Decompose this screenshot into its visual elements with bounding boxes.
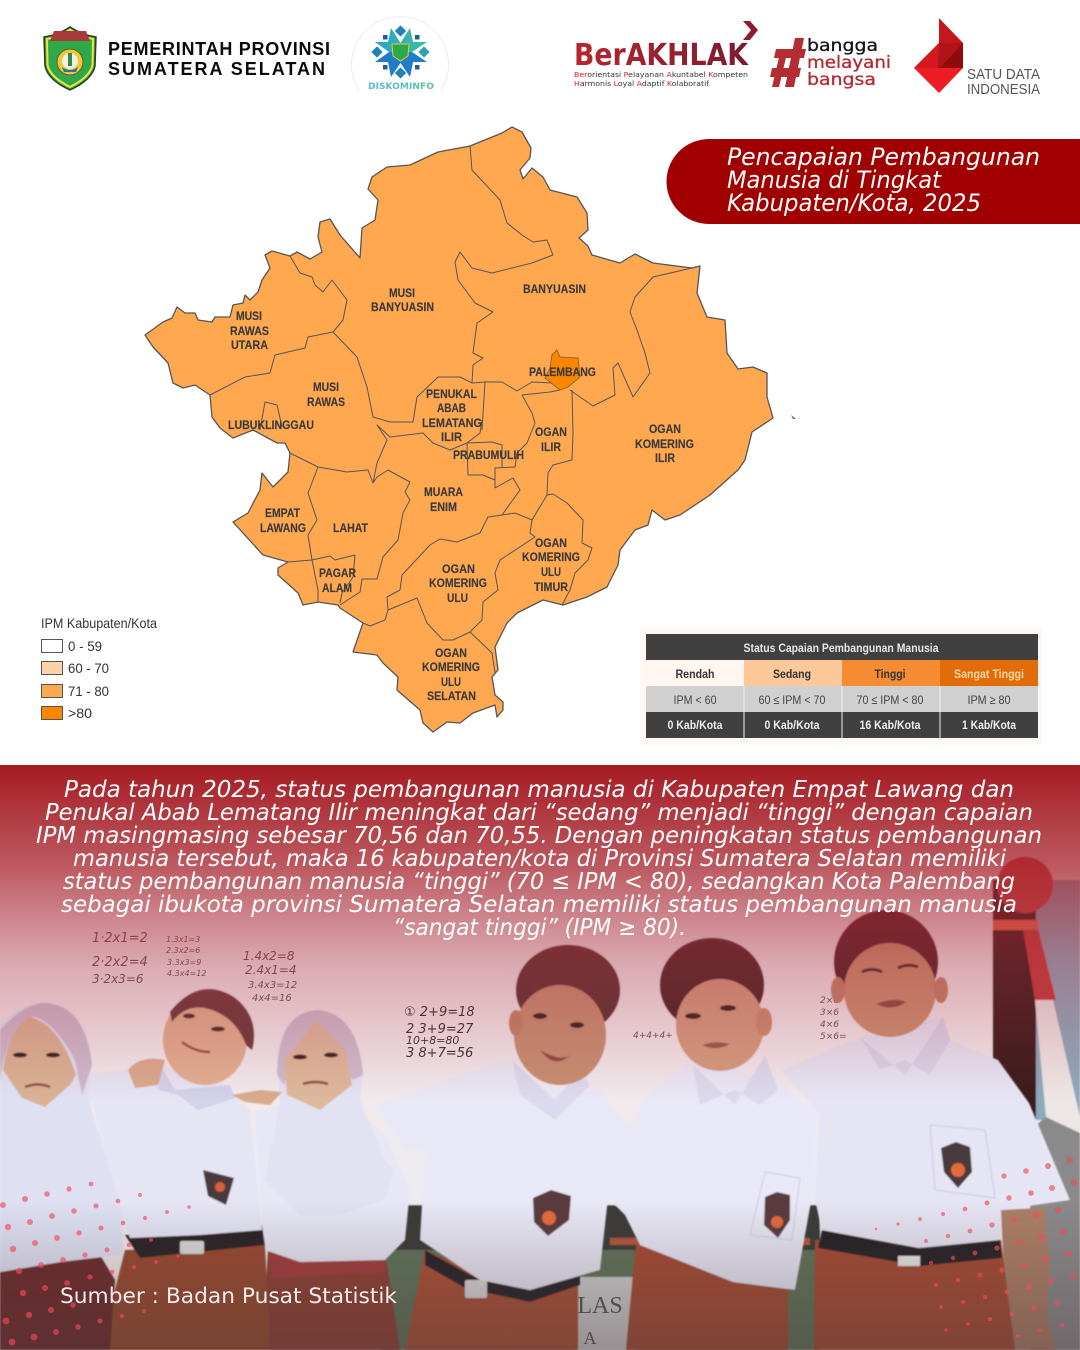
child 2 bbox=[85, 989, 282, 1350]
icon: provincial coat of arms bbox=[44, 27, 96, 90]
photo: background scene bbox=[380, 856, 1080, 1350]
photo: chalk arithmetic on board: 2×6 bbox=[820, 996, 839, 1006]
icon: hash bbox=[770, 38, 806, 87]
labels: district names: RAWAS bbox=[230, 324, 269, 338]
labels: district names: ILIR bbox=[541, 440, 561, 454]
labels: district names: SELATAN bbox=[427, 689, 476, 703]
panel: photo of schoolchildren with red overlay bbox=[0, 765, 1080, 1350]
labels: district names: OGAN bbox=[535, 425, 567, 439]
labels: district names: OGAN bbox=[649, 422, 681, 436]
child 6 bbox=[781, 910, 1070, 1350]
labels: district names: ULU bbox=[447, 591, 468, 605]
labels: district names: ILIR bbox=[655, 451, 675, 465]
labels: district names: ULU bbox=[541, 565, 561, 579]
logo: Satu Data Indonesia bbox=[914, 18, 1040, 98]
range row bbox=[646, 686, 1038, 712]
photo: chalk arithmetic on board: 4x4=16 bbox=[252, 993, 292, 1004]
labels: district names: EMPAT bbox=[265, 506, 301, 520]
logo: bangga melayani bangsa bbox=[770, 36, 891, 90]
labels: district names: ABAB bbox=[437, 401, 466, 415]
status row: Tinggi bbox=[874, 667, 906, 681]
child 4 bbox=[375, 945, 632, 1350]
text block: narrative paragraph: IPM masingmasing sebesar 70,56 dan 70,55. Dengan peningkatan status pembangunan bbox=[36, 823, 1042, 849]
count row: 16 Kab/Kota bbox=[860, 718, 921, 732]
text block: narrative paragraph: “sangat tinggi” (IPM ≥ 80). bbox=[393, 915, 686, 941]
count row bbox=[646, 712, 1038, 738]
tagline: BerAKHLAK line 2: Harmonis Loyal Adaptif Kolaboratif bbox=[574, 80, 710, 88]
photo: chalk arithmetic on board: 2.4x1=4 bbox=[245, 963, 297, 977]
banner shape bbox=[667, 139, 1080, 224]
legend item 0-59: 0 - 59 bbox=[68, 638, 102, 654]
labels: district names: RAWAS bbox=[307, 395, 345, 409]
photo: chalk arithmetic on board: 10+8=80 bbox=[406, 1034, 459, 1047]
range row: IPM < 60 bbox=[674, 693, 717, 707]
legend item 71-80: 71 - 80 bbox=[68, 683, 109, 699]
table: Status Capaian Pembangunan Manusia bbox=[640, 628, 1042, 745]
logo: BerAKHLAK bbox=[574, 21, 758, 88]
tagline: BerAKHLAK line 1: Berorientasi Pelayanan Akuntabel Kompeten bbox=[574, 71, 748, 79]
overlay: grey bottom gradient bbox=[0, 1216, 1080, 1350]
labels: district names bbox=[228, 282, 694, 703]
labels: district names: PENUKAL bbox=[426, 387, 477, 401]
labels: district names: MUSI bbox=[236, 309, 262, 323]
labels: district names: MUSI bbox=[313, 380, 339, 394]
decoration: red dot pattern bbox=[0, 1157, 1077, 1345]
text block: narrative paragraph: manusia tersebut, maka 16 kabupaten/kota di Provinsi Sumatera Selatan memiliki bbox=[73, 846, 1007, 872]
labels: district names: UTARA bbox=[231, 338, 268, 352]
photo: chalk arithmetic on board: LAS bbox=[577, 1293, 623, 1319]
labels: district names: BANYUASIN bbox=[523, 282, 586, 296]
labels: district names: ENIM bbox=[430, 500, 457, 514]
photo: chalk arithmetic on board: 3×6 bbox=[820, 1008, 839, 1018]
photo: chalk arithmetic on board: 5×6= bbox=[820, 1032, 847, 1042]
labels: district names: MUARA bbox=[424, 485, 463, 499]
logo: Pemerintah Provinsi Sumatera Selatan bbox=[44, 27, 330, 90]
labels: district names: TIMUR bbox=[534, 580, 568, 594]
range row: 70 ≤ IPM < 80 bbox=[856, 693, 924, 707]
labels: district names: LAHAT bbox=[333, 521, 369, 535]
logo: Diskominfo bbox=[351, 16, 449, 91]
photo: chalk arithmetic on board: A bbox=[584, 1328, 596, 1348]
map: South Sumatra IPM choropleth bbox=[145, 127, 796, 732]
count row: 0 Kab/Kota bbox=[764, 718, 820, 732]
source credit: Sumber : Badan Pusat Statistik bbox=[60, 1284, 398, 1308]
labels: district names: BANYUASIN bbox=[371, 300, 434, 314]
photo: chalk arithmetic on board: ① 2+9=18 bbox=[404, 1005, 475, 1020]
region: Palembang highlighted bbox=[545, 350, 580, 390]
status row: Sedang bbox=[773, 667, 811, 681]
labels: district names: ULU bbox=[441, 675, 461, 689]
photo: chalk arithmetic on board: 1.3x1=3 bbox=[166, 935, 200, 944]
labels: district names: MUSI bbox=[389, 286, 415, 300]
labels: district names: PAGAR bbox=[319, 566, 356, 580]
icon: small island bbox=[791, 415, 796, 419]
photo: chalk arithmetic on board: 4×6 bbox=[820, 1020, 839, 1030]
labels: district names: KOMERING bbox=[422, 660, 480, 674]
photo: chalk arithmetic on board: 1·2x1=2 bbox=[92, 931, 148, 946]
icon: red kite bbox=[914, 18, 963, 93]
title banner bbox=[667, 139, 1080, 224]
labels: district names: KOMERING bbox=[429, 576, 487, 590]
labels: district names: LEMATANG bbox=[422, 416, 482, 430]
legend item 60-70: 60 - 70 bbox=[68, 660, 109, 676]
labels: district names: PRABUMULIH bbox=[453, 448, 524, 462]
icon: Diskominfo star bbox=[371, 25, 430, 79]
labels: district names: ALAM bbox=[322, 581, 352, 595]
child 5 bbox=[600, 938, 815, 1350]
photo: chalk arithmetic on board: 1.4x2=8 bbox=[243, 949, 295, 963]
text block: narrative paragraph: Pada tahun 2025, status pembangunan manusia di Kabupaten Empat Lawang dan bbox=[64, 777, 1014, 803]
photo: chalk arithmetic on board: 4+4+4+ bbox=[633, 1031, 673, 1041]
labels: district names: PALEMBANG bbox=[529, 365, 596, 379]
legend item >80: >80 bbox=[68, 705, 92, 721]
photo: chalk arithmetic on board: 2 3+9=27 bbox=[406, 1022, 474, 1037]
labels: district names: KOMERING bbox=[522, 550, 580, 564]
icon: chevron bbox=[743, 21, 758, 40]
photo: chalk arithmetic on board bbox=[92, 931, 847, 1348]
region: internal district borders bbox=[210, 146, 692, 673]
photo: children in school uniforms bbox=[0, 910, 1070, 1350]
photo: chalk arithmetic on board: 2·2x2=4 bbox=[92, 955, 148, 970]
table header: Status Capaian Pembangunan Manusia bbox=[744, 641, 939, 655]
count row: 1 Kab/Kota bbox=[962, 718, 1016, 732]
photo: chalk arithmetic on board: 3·2x3=6 bbox=[92, 972, 144, 986]
labels: district names: OGAN bbox=[442, 562, 475, 576]
text block: narrative paragraph: sebagai ibukota provinsi Sumatera Selatan memiliki status pembangunan manusia bbox=[61, 892, 1017, 918]
photo: chalk arithmetic on board: 2.3x2=6 bbox=[166, 946, 200, 955]
legend title: IPM Kabupaten/Kota bbox=[41, 615, 157, 631]
text block: narrative paragraph: Penukal Abab Lematang Ilir meningkat dari “sedang” menjadi “tinggi” dengan capaian bbox=[45, 800, 1033, 826]
labels: district names: LUBUKLINGGAU bbox=[228, 418, 314, 432]
labels: district names: OGAN bbox=[535, 536, 567, 550]
region: province fill bbox=[145, 127, 773, 732]
text block: narrative paragraph: status pembangunan manusia “tinggi” (70 ≤ IPM < 80), sedangkan Kota Palembang bbox=[63, 869, 1015, 895]
text: bangga: bangga bbox=[807, 36, 878, 56]
photo: chalk arithmetic on board: 3.3x3=9 bbox=[167, 958, 201, 967]
heading: Pemerintah Provinsi: PEMERINTAH PROVINSI bbox=[108, 39, 330, 59]
range row: 60 ≤ IPM < 70 bbox=[758, 693, 826, 707]
range row: IPM ≥ 80 bbox=[968, 693, 1011, 707]
child 1 bbox=[0, 1003, 123, 1350]
labels: district names: ILIR bbox=[441, 430, 462, 444]
text: melayani: melayani bbox=[807, 53, 891, 73]
label: Diskominfo: DISKOMINFO bbox=[368, 82, 434, 92]
table header bbox=[646, 634, 1038, 660]
overlay: red top gradient bbox=[0, 765, 1080, 1100]
status row bbox=[646, 660, 1038, 686]
text block: narrative paragraph bbox=[36, 777, 1042, 941]
photo: chalk arithmetic on board: 4.3x4=12 bbox=[167, 969, 206, 978]
child 3 bbox=[255, 1010, 410, 1350]
status row: Sangat Tinggi bbox=[954, 667, 1024, 681]
text: bangsa: bangsa bbox=[807, 70, 876, 90]
text: Satu Data: SATU DATA bbox=[967, 66, 1040, 83]
heading: Sumatera Selatan: SUMATERA SELATAN bbox=[108, 59, 325, 79]
text: Indonesia: INDONESIA bbox=[967, 81, 1040, 98]
legend: IPM Kabupaten/Kota bbox=[41, 615, 157, 721]
status row: Rendah bbox=[676, 667, 714, 681]
photo: chalk arithmetic on board: 3.4x3=12 bbox=[248, 980, 297, 991]
title line 1: Pencapaian Pembangunan bbox=[727, 143, 1040, 171]
labels: district names: OGAN bbox=[435, 646, 467, 660]
labels: district names: LAWANG bbox=[260, 521, 306, 535]
count row: 0 Kab/Kota bbox=[668, 718, 723, 732]
title line 2: Manusia di Tingkat bbox=[727, 166, 942, 194]
wordmark: BerAKHLAK: BerAKHLAK bbox=[574, 38, 750, 73]
title line 3: Kabupaten/Kota, 2025 bbox=[727, 189, 981, 217]
labels: district names: KOMERING bbox=[635, 437, 694, 451]
photo: chalk arithmetic on board: 3 8+7=56 bbox=[406, 1046, 473, 1061]
